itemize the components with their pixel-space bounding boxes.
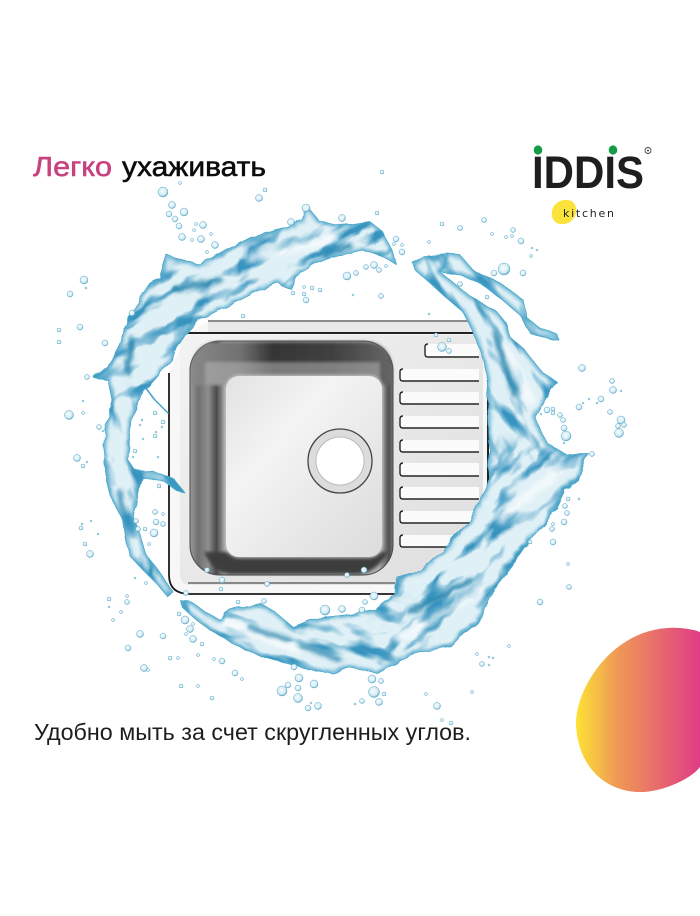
drain [308,429,372,493]
sink back frame [169,322,488,594]
title: ухаживать [122,151,266,182]
logo: IDDIS kitchen: kitchen [563,207,614,220]
sink bowl [190,341,393,575]
sink plate [180,335,483,585]
sink [169,321,488,594]
title [33,151,266,182]
water droplets [57,170,626,725]
drainboard ribs [400,344,479,547]
caption: Удобно мыть за счет скругленных углов. [34,719,471,745]
infographic canvas [32,145,700,792]
logo: IDDIS kitchen [532,145,651,224]
water splash ring [92,209,589,674]
logo: IDDIS kitchen: IDDIS [532,147,644,198]
gradient blob [576,628,700,792]
title: Легко [33,151,112,182]
